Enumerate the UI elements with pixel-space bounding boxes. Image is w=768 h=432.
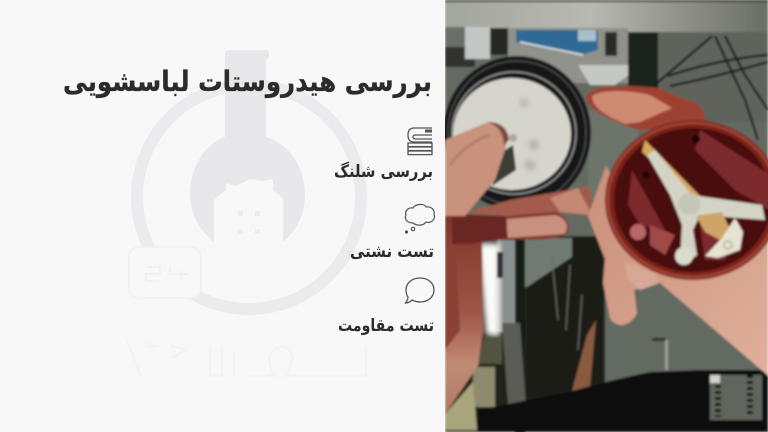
watermark: wrench (190, 50, 305, 242)
label: leak test: تست نشتی (350, 242, 434, 262)
photo: thumb on ring (445, 122, 509, 216)
icon: thought cloud (405, 204, 434, 233)
photo: gasket ring (443, 56, 591, 210)
label: resistance test: تست مقاومت (338, 316, 434, 336)
watermark logo (127, 50, 366, 376)
watermark: brand wordmark (127, 340, 366, 376)
photo: hands holding hydrostat (443, 0, 768, 432)
watermark: ring (137, 85, 361, 309)
label: hose check: بررسی شلنگ (334, 161, 433, 182)
photo: right hand (586, 86, 768, 376)
left panel background (0, 0, 445, 432)
photo: dark lower machine (445, 110, 768, 432)
photo: floor (445, 54, 768, 383)
icon: speech bubble (406, 278, 434, 303)
photo: machine interior backdrop (445, 0, 768, 140)
watermark: house windows (238, 211, 260, 234)
photo: hydrostat contact arms (642, 140, 765, 265)
title: بررسی هیدروستات لباسشویی (63, 65, 432, 98)
watermark: 24 badge (129, 247, 201, 298)
photo: hydrostat body (605, 120, 768, 280)
photo: left hand (445, 186, 592, 414)
icon: hose (408, 128, 432, 155)
